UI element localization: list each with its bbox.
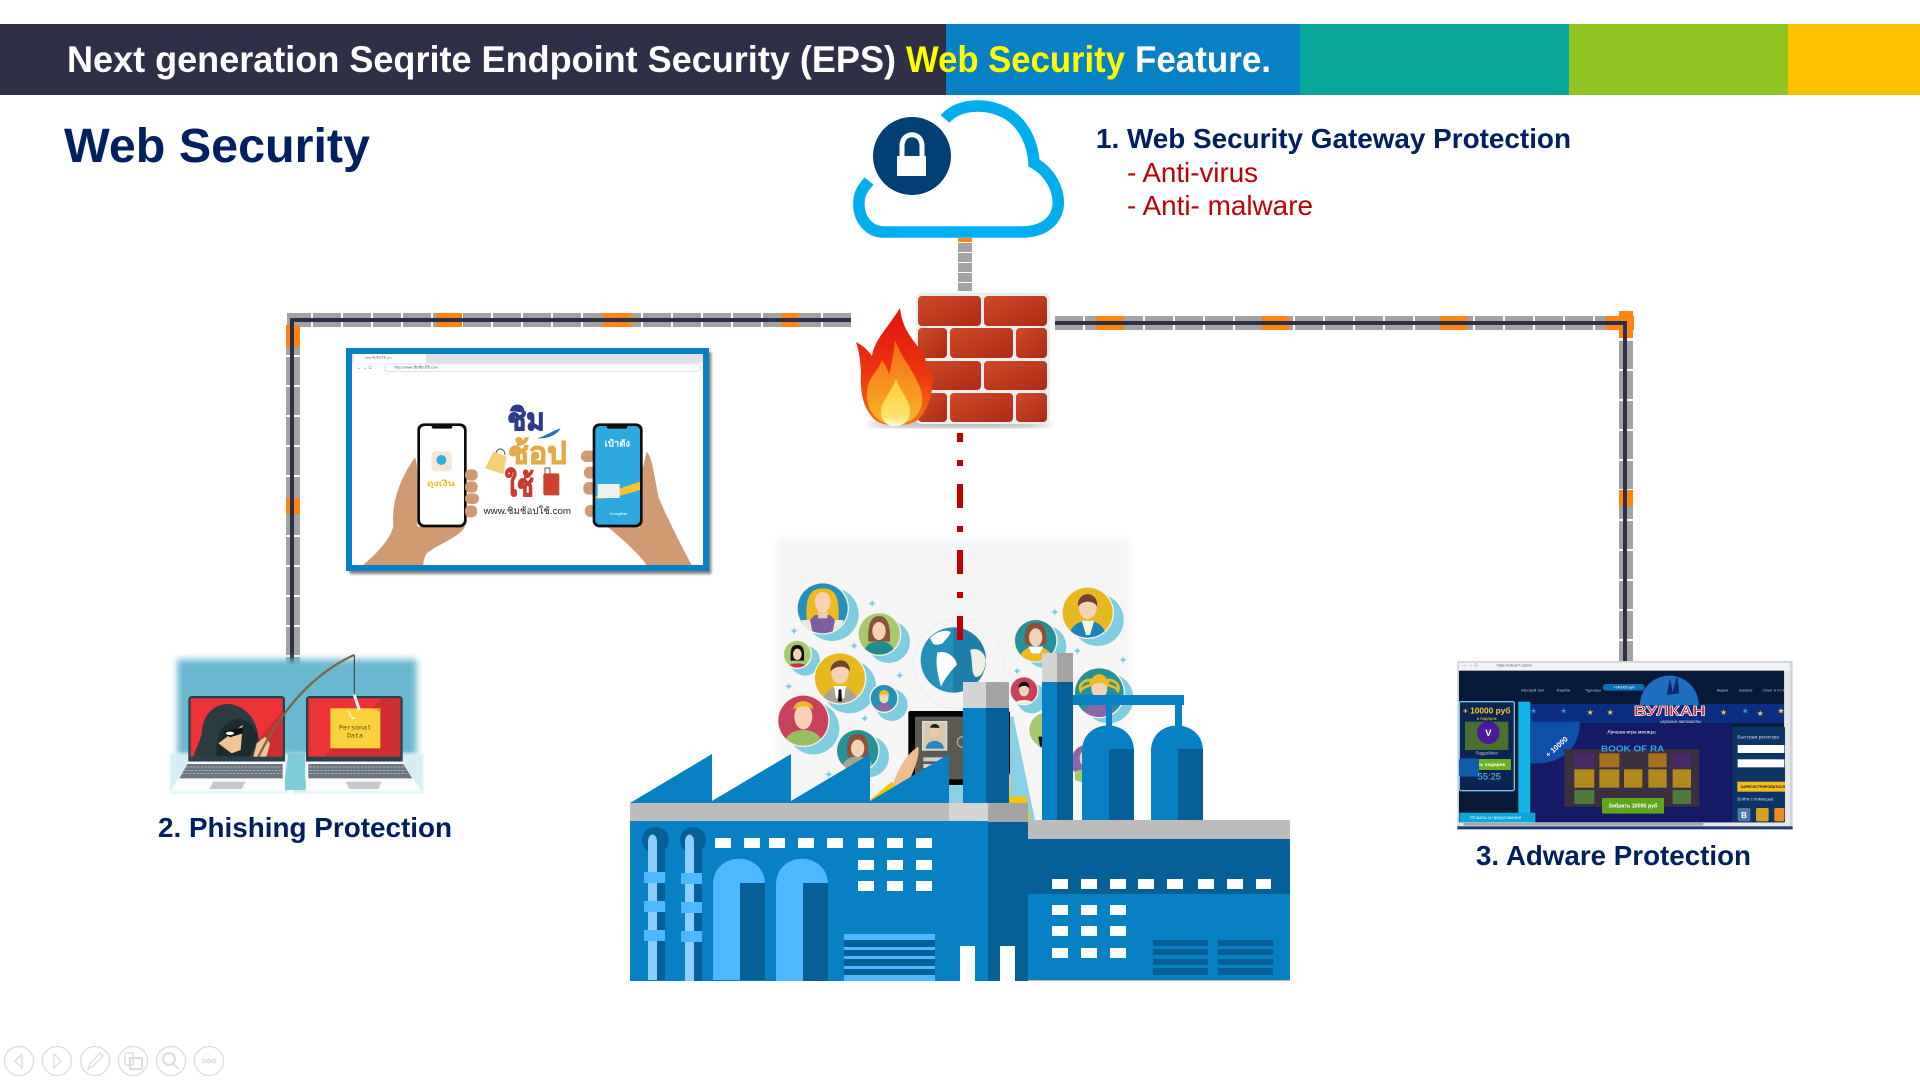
left promo card: + 10000 руб [1463,705,1510,715]
panel: adware casino screenshot [1457,661,1793,829]
sparkles: ✦ [1118,653,1128,667]
left laptop with hacker [170,696,285,792]
registration panel: ЗАРЕГИСТРИРОВАТЬСЯ [1741,785,1786,789]
people avatars [777,582,1133,787]
blue banner and logo: игровые автоматы [1660,719,1702,724]
sparkles [784,597,1128,781]
sparkles: ✦ [1073,644,1083,658]
header title: Next generation Seqrite Endpoint Security (EPS) [67,39,896,80]
registration panel: Войти с помощью: [1737,797,1774,802]
nav strip [1521,687,1786,692]
pipes [642,827,706,981]
globe [913,619,1004,709]
slot panel: Лучшая игра месяца: [1607,729,1657,734]
registration panel [1732,727,1786,822]
left building [630,803,1028,981]
icon: cloud with lock [859,106,1058,232]
blue banner and logo: ★ [1720,708,1727,717]
illustration: factory [630,653,1290,981]
arches [713,859,828,981]
text: web security gateway protection: 1. Web Security Gateway Protection [1096,123,1571,154]
blue banner and logo: ★ [1560,706,1567,715]
chimneys [963,653,1073,822]
blue banner and logo: ВУЛКАН [1634,703,1705,719]
registration panel: Быстрая регистра [1737,734,1779,740]
blue banner and logo: ★ [1587,708,1594,717]
icon: firewall with flame [856,293,1052,428]
icon: flame [856,308,933,426]
header bar [0,24,1920,95]
logo and url: ช้อป [508,436,567,470]
browser chrome: ← → C [357,365,373,370]
storage tanks and pipe [1073,695,1203,821]
right laptop with folder: Personal [339,723,371,731]
left promo card: Подробнее [1475,751,1498,756]
panel: adware casino screenshot: https://vulcan7.casino [1497,663,1532,667]
sparkles: ✦ [867,597,877,611]
right laptop with folder [306,696,422,792]
left promo card: в подарок [1477,716,1497,721]
registration panel: В [1741,811,1747,820]
browser chrome: www.ชิมช้อปใช้.com [365,355,392,359]
left promo card: V [1485,728,1492,738]
feedback tab: Отзывы и предложения [1470,815,1522,820]
illustration: phishing laptops [170,655,423,793]
feedback tab [1459,813,1535,822]
left hand with phone [363,423,479,565]
label: phishing protection: 2. Phishing Protection [158,812,452,843]
nav strip: Баланс [1739,687,1753,692]
connector: red dashed link [957,433,963,640]
slot panel: Забрать 10000 руб [1609,803,1658,810]
logo and url: www.ชิมช้อปใช้.com [483,505,571,516]
blue banner and logo: ★ [1530,706,1537,715]
text: web security gateway protection: - Anti-virus [1127,157,1258,188]
neon column [1518,702,1530,822]
slideshow navigation icons [4,1046,224,1076]
label: adware protection: 3. Adware Protection [1476,840,1751,871]
right hand with phone: เป๋าตัง [605,438,630,449]
text: web security gateway protection: - Anti- malware [1127,190,1313,221]
sparkles: ✦ [1050,605,1060,619]
nav strip: Турниры [1585,687,1601,692]
connector: left network line [286,313,851,665]
roof sawtooth [630,754,949,803]
header title: Feature. [1135,39,1271,80]
fishing rod and hook [258,655,359,757]
slot panel: BOOK OF RA [1601,744,1665,754]
left promo card [1459,702,1514,791]
sparkles: ✦ [824,767,834,781]
left hand with phone: ถุงเงิน [427,479,456,489]
left promo card: 55:25 [1478,771,1501,781]
blue banner and logo: ★ [1742,706,1749,715]
right building [1028,820,1290,981]
header title: Web Security [906,39,1125,80]
blue banner and logo: +140000 руб [1613,686,1635,690]
logo and url [483,403,571,516]
illustration: connected people [777,537,1133,824]
page heading: Web Security: Web Security [64,120,370,173]
panel: adware casino screenshot: ← → C [1463,663,1479,668]
slot panel: + 10000 [1544,735,1570,759]
sparkles: ✦ [895,669,905,683]
loading vent [844,934,935,981]
connector: cloud to firewall [958,238,972,291]
left promo card: ить подарок [1475,762,1506,768]
logo and url: ชิม [507,403,545,437]
sparkles: ✦ [784,680,794,694]
browser chrome [352,354,703,373]
nav strip: Акции [1717,687,1728,692]
sparkles: ✦ [849,639,859,653]
panel: website screenshot [346,348,711,574]
right hand with phone [581,423,692,565]
nav strip: Опыт и V.I.P [1763,687,1786,692]
slot panel [1531,722,1732,822]
right laptop with folder: Data [347,731,363,739]
logo and url: ใช้ [505,467,534,503]
sparkles: ✦ [789,624,799,638]
sparkles: ✦ [1012,664,1022,678]
browser chrome: https://www.ชิมช้อปใช้.com [394,365,438,370]
blue banner and logo: ★ [1777,706,1785,715]
tablet [870,711,1035,820]
blue banner and logo [1530,675,1785,724]
nav strip: Игровой Зал [1521,687,1545,692]
sparkles: ✦ [860,712,870,726]
connector: right network line [1055,311,1634,661]
text: web security gateway protection [1096,123,1571,221]
blue banner and logo: ★ [1757,709,1764,718]
nav strip: Кэшбэк [1557,687,1570,692]
blue banner and logo: ★ [1607,708,1614,717]
right hand with phone: Krungthai [610,511,627,516]
